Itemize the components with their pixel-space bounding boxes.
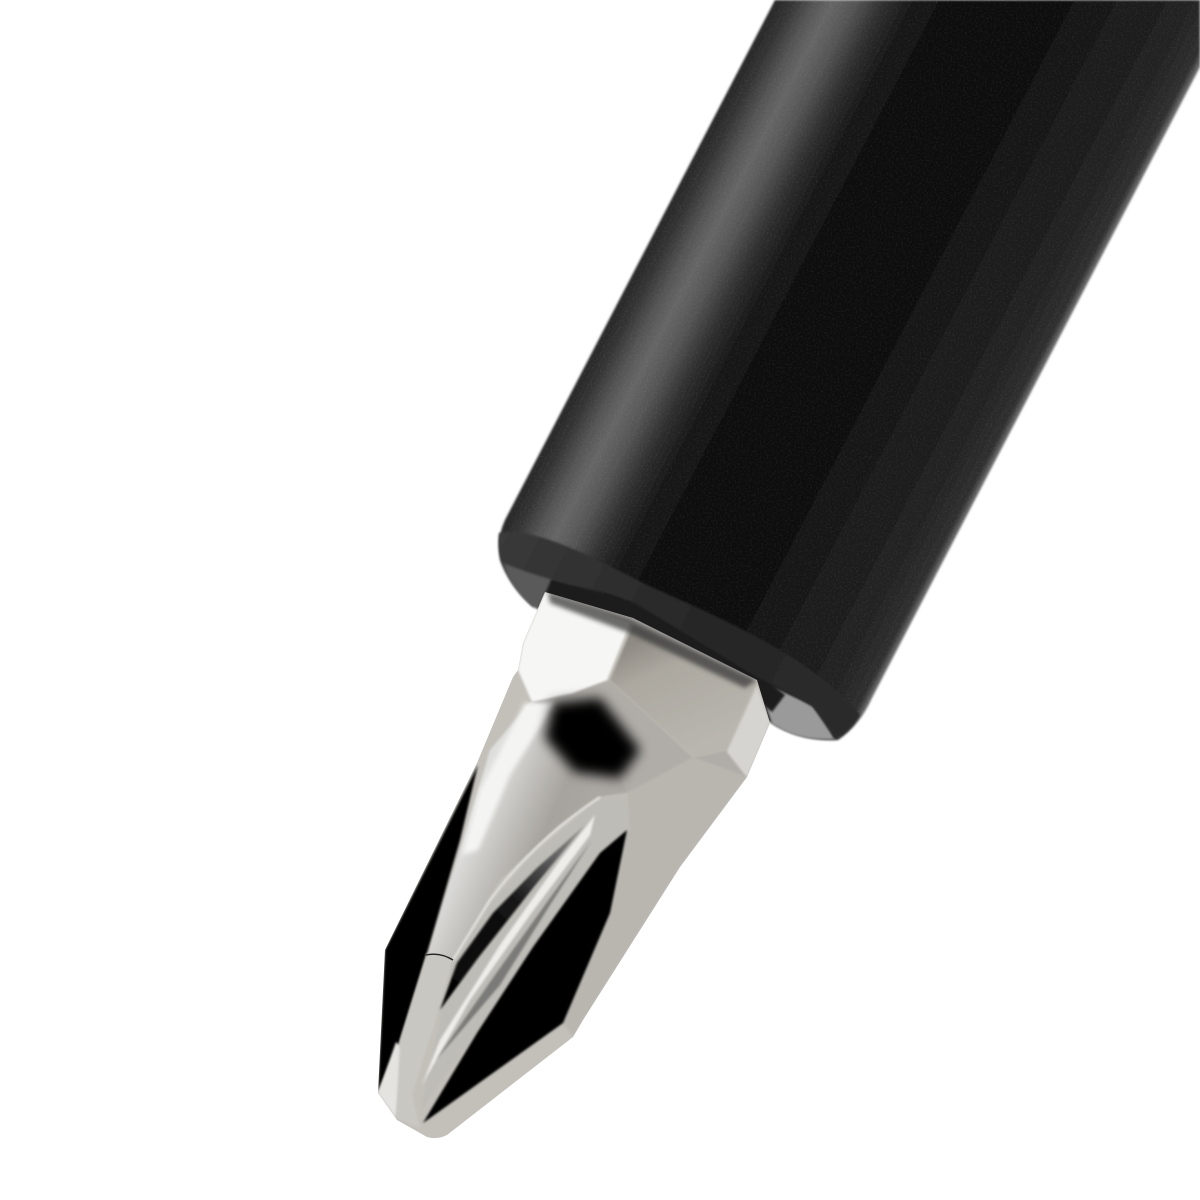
hex facet: bright [518,592,630,702]
left recess highlight [378,1041,400,1117]
right shaft facet [563,757,747,1037]
dark reflection spot [545,698,640,778]
groove upper dark wedge [440,825,585,1010]
handle [490,0,1200,750]
end ring [498,532,860,738]
photo: screwdriver tip [378,0,1200,1138]
main facet [428,702,599,955]
groove right black [423,830,627,1123]
handle body [499,0,1200,740]
recess shadow [545,578,785,712]
scratch on ridge [426,954,453,960]
hex facet: right [727,687,770,777]
left ridge highlight [462,703,555,855]
groove base [420,793,630,1112]
recess right [757,680,835,739]
driver bit [378,592,770,1138]
recess left [503,560,555,607]
left recess: black [378,765,478,1092]
shadow under collar [548,592,757,688]
hex facet: matte [610,625,757,757]
groove thin dark line [436,840,592,1060]
tip facet [396,953,453,1128]
ridge edge line [453,797,600,960]
handle texture [490,0,1200,750]
upper shaft [530,680,744,792]
bit silhouette [378,592,770,1138]
groove bright strip [422,815,595,1085]
